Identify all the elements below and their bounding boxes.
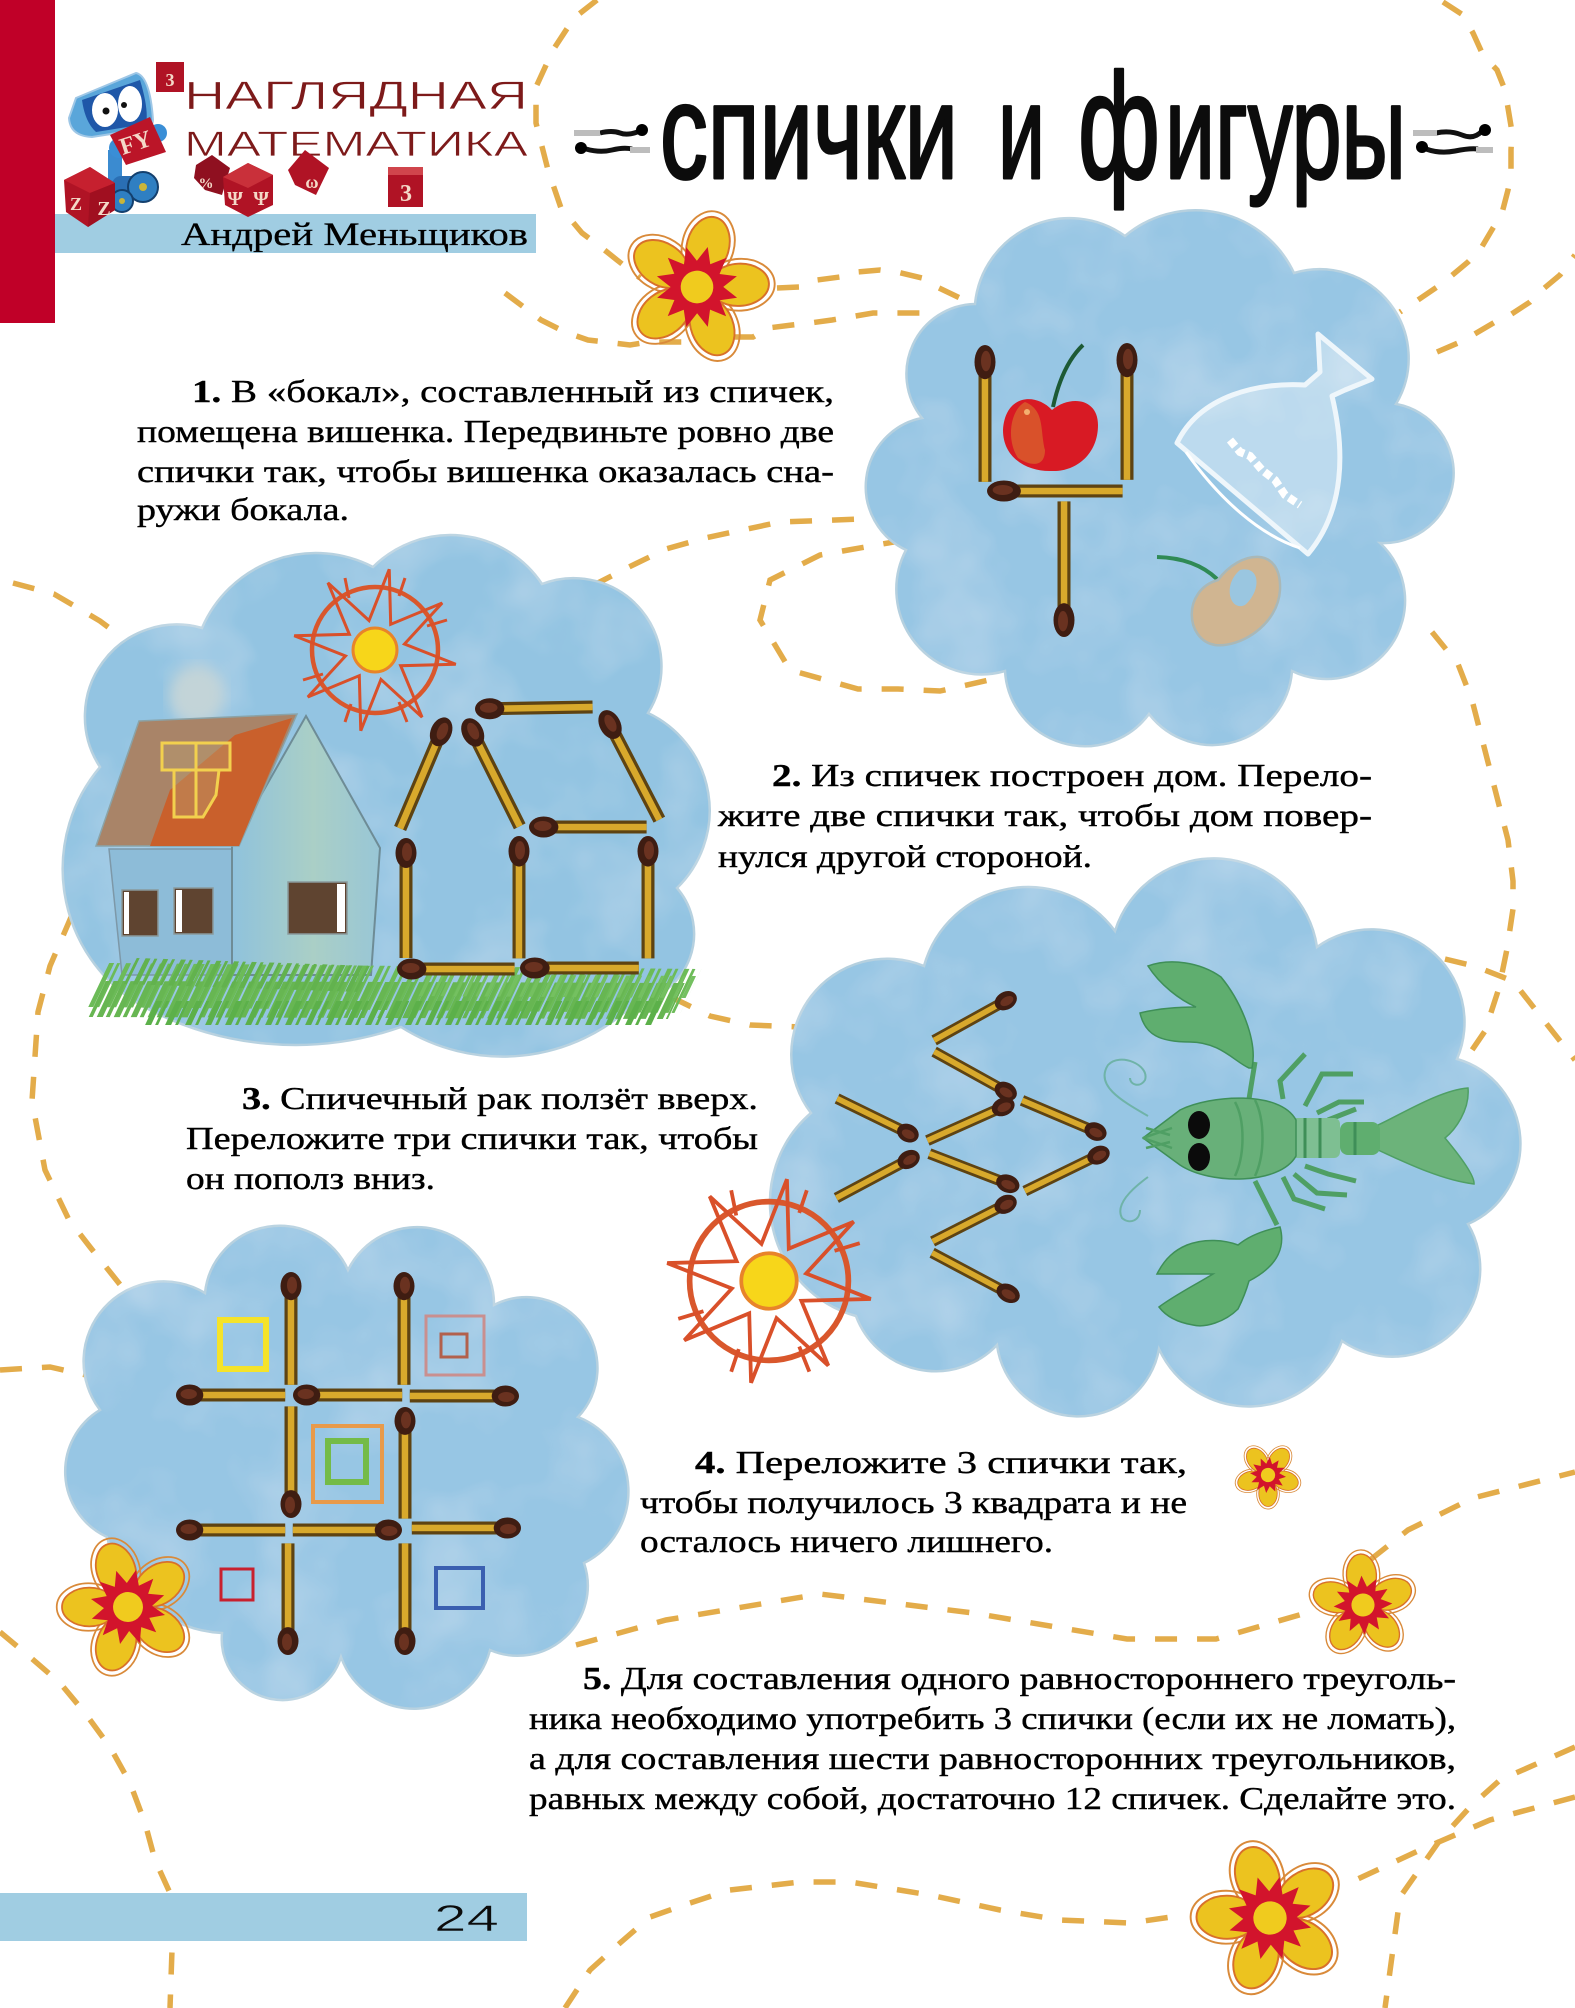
text: puzzle 1 xyxy=(137,373,834,527)
cherry xyxy=(1003,345,1098,471)
icon: title right matches xyxy=(1413,124,1493,153)
crayfish head xyxy=(1143,1098,1296,1179)
text: puzzle 5: равных между собой, достаточно 12 спичек. Сделайте это. xyxy=(529,1780,1456,1816)
panel: cloud with house xyxy=(63,535,710,1057)
text: puzzle 1: 1. В «бокал», составленный из спичек, xyxy=(192,373,834,409)
title: игуры xyxy=(1165,56,1406,207)
house gable wall xyxy=(232,716,380,975)
text: puzzle 2 xyxy=(717,757,1372,874)
icon: small flower xyxy=(1219,1426,1317,1524)
die lower left: Z xyxy=(70,194,82,214)
text: puzzle 1: помещена вишенка. Передвиньте ровно две xyxy=(137,413,834,449)
die lower left xyxy=(64,167,115,227)
panel: cloud with glass and cherry xyxy=(866,210,1454,746)
painted house xyxy=(96,714,380,975)
die held by robot xyxy=(110,117,166,165)
text: puzzle 5: 5. Для составления одного равностороннего треуголь- xyxy=(583,1660,1456,1696)
fallen cherry xyxy=(1157,557,1280,645)
coloured squares xyxy=(220,1316,484,1608)
die percent: % xyxy=(198,176,214,192)
die percent xyxy=(194,155,230,195)
robot wheels and body xyxy=(108,150,158,212)
text: puzzle 4: чтобы получилось 3 квадрата и не xyxy=(640,1484,1187,1520)
die held by robot: FY xyxy=(117,126,155,161)
icon: flower top xyxy=(598,191,796,384)
roof dormer xyxy=(162,743,230,817)
title: спички xyxy=(660,56,958,207)
die omega xyxy=(288,150,329,195)
cloud 1 shape xyxy=(866,210,1454,746)
die psi: Ψ xyxy=(227,188,243,210)
icon: medium flower xyxy=(1302,1547,1424,1663)
author name: Андрей Меньщиков xyxy=(181,217,528,253)
title: ф xyxy=(1078,42,1160,210)
panel: page number strip xyxy=(0,1893,527,1941)
green crayfish xyxy=(1104,962,1474,1326)
icon: robot with dice xyxy=(64,62,423,227)
text: puzzle 2: 2. Из спичек построен дом. Перело- xyxy=(772,757,1372,793)
house roof xyxy=(96,714,297,846)
matchstick house xyxy=(390,696,669,980)
crayfish antennae xyxy=(1104,1060,1148,1221)
text: puzzle 5: ника необходимо употребить 3 спички (если их не ломать), xyxy=(529,1700,1456,1736)
matchstick grid xyxy=(176,1272,521,1655)
text: puzzle 2: нулся другой стороной. xyxy=(718,838,1092,874)
panel: header side bar xyxy=(0,0,55,323)
crayfish tail xyxy=(1378,1088,1474,1184)
die three xyxy=(388,167,423,207)
window highlights xyxy=(124,884,345,934)
die psi: Ψ xyxy=(253,188,269,210)
die lower left: Z xyxy=(97,198,111,220)
text: puzzle 4: 4. Переложите 3 спички так, xyxy=(695,1444,1187,1480)
title xyxy=(660,42,1406,210)
crayfish lower claw xyxy=(1157,1227,1282,1326)
series title xyxy=(184,74,529,164)
panel: author strip xyxy=(55,214,536,253)
crayfish abdomen xyxy=(1290,1118,1380,1158)
die small top xyxy=(156,62,184,92)
text: puzzle 3: Переложите три спички так, чтобы xyxy=(186,1120,758,1156)
crayfish legs xyxy=(1249,1054,1364,1225)
icon: flower bottom xyxy=(1167,1818,1373,2008)
cloud 2 shape xyxy=(63,535,710,1057)
series title: НАГЛЯДНАЯ xyxy=(184,74,528,118)
die omega: ω xyxy=(305,172,319,192)
matchstick glass xyxy=(974,343,1138,637)
windows xyxy=(122,882,347,936)
text: puzzle 4: осталось ничего лишнего. xyxy=(640,1523,1053,1559)
crystal glass xyxy=(1177,334,1372,554)
sun near crayfish xyxy=(649,1161,889,1401)
roof orange shade xyxy=(150,718,292,846)
panel: cloud with crayfish xyxy=(770,858,1520,1416)
matchstick crayfish xyxy=(832,987,1113,1307)
panel: cloud with match grid xyxy=(65,1226,628,1709)
chimney smoke xyxy=(169,665,225,725)
crayfish eyes xyxy=(1188,1111,1210,1171)
icon: title left matches xyxy=(574,124,650,154)
text: puzzle 1: спички так, чтобы вишенка оказалась сна- xyxy=(137,453,834,489)
crayfish head stripes xyxy=(1143,1100,1262,1176)
crayfish upper claw xyxy=(1140,962,1253,1068)
title: и xyxy=(998,56,1045,207)
icon: flower left xyxy=(35,1516,222,1698)
die small top: 3 xyxy=(166,70,174,90)
sun xyxy=(280,555,470,745)
text: puzzle 2: жите две спички так, чтобы дом повер- xyxy=(717,797,1372,833)
house side wall xyxy=(109,849,234,975)
robot hands xyxy=(109,124,167,158)
grass xyxy=(86,971,700,1013)
text: puzzle 5: а для составления шести равносторонних треугольников, xyxy=(529,1740,1456,1776)
die three: 3 xyxy=(400,181,412,207)
die psi xyxy=(223,163,273,217)
series title: МАТЕМАТИКА xyxy=(184,125,529,164)
text: puzzle 3: он пополз вниз. xyxy=(186,1160,435,1196)
text: puzzle 3 xyxy=(186,1080,758,1196)
cloud 4 shape xyxy=(65,1226,628,1709)
text: puzzle 4 xyxy=(640,1444,1187,1559)
text: puzzle 1: ружи бокала. xyxy=(137,491,349,527)
text: puzzle 5 xyxy=(529,1660,1456,1816)
robot head xyxy=(69,73,153,137)
page number: 24 xyxy=(434,1898,499,1939)
cloud 3 shape xyxy=(770,858,1520,1416)
text: puzzle 3: 3. Спичечный рак ползёт вверх. xyxy=(242,1080,758,1116)
